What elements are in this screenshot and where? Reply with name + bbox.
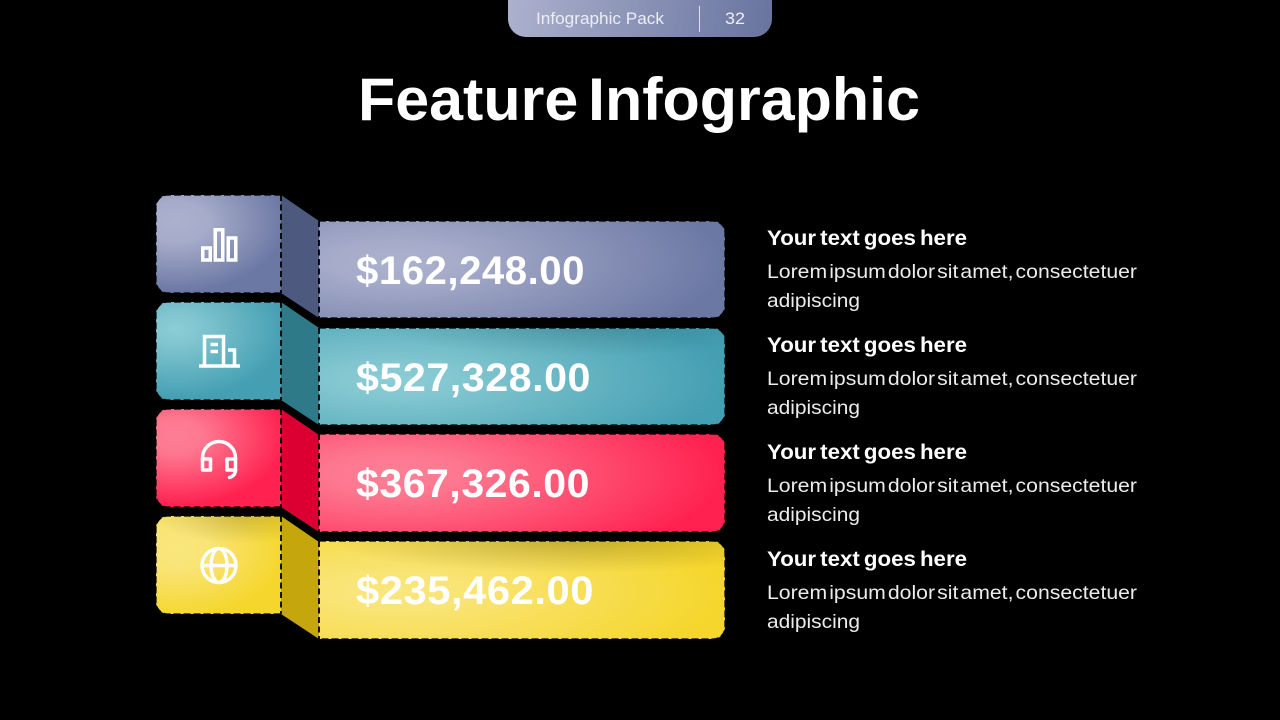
feature row 4: yellow	[155, 516, 725, 639]
feature row 1: slate	[156, 195, 725, 318]
description 3: adipiscing	[767, 504, 860, 526]
description 2	[767, 333, 1138, 419]
value block	[319, 221, 725, 318]
description 3: Lorem ipsum dolor sit amet, consectetuer	[767, 475, 1138, 497]
description 1: Lorem ipsum dolor sit amet, consectetuer	[767, 261, 1138, 283]
feature row 3: red	[156, 409, 725, 532]
icon block	[156, 195, 281, 293]
value: $367,326.00	[356, 462, 590, 506]
page number: 32	[725, 9, 745, 28]
description 3: Your text goes here	[767, 440, 967, 464]
value: $235,462.00	[356, 569, 594, 613]
side fold	[281, 516, 319, 639]
description 4: Your text goes here	[767, 547, 967, 571]
value: $162,248.00	[356, 249, 585, 293]
header tab	[508, 0, 772, 37]
icon: bar chart	[203, 230, 236, 260]
icon: building	[199, 336, 240, 366]
description 2: adipiscing	[767, 397, 860, 419]
description 1: Your text goes here	[767, 226, 967, 250]
value: $527,328.00	[356, 356, 591, 400]
value block	[319, 328, 725, 425]
side fold	[281, 195, 319, 318]
feature row 2: teal	[156, 302, 725, 425]
icon: globe	[202, 548, 236, 582]
side fold	[281, 409, 319, 532]
description 4: adipiscing	[767, 611, 860, 633]
description 1: adipiscing	[767, 290, 860, 312]
icon block	[156, 409, 281, 507]
description 4: Lorem ipsum dolor sit amet, consectetuer	[767, 582, 1138, 604]
icon block	[156, 516, 281, 614]
description 2: Lorem ipsum dolor sit amet, consectetuer	[767, 368, 1138, 390]
icon: headset	[202, 442, 236, 478]
value block	[319, 541, 725, 639]
header tab label: Infographic Pack	[536, 9, 664, 28]
value block	[319, 434, 725, 532]
description 4	[767, 547, 1138, 633]
side fold	[281, 302, 319, 425]
description 2: Your text goes here	[767, 333, 967, 357]
description 1	[767, 226, 1138, 312]
icon block	[156, 302, 281, 400]
title: Feature Infographic	[358, 66, 920, 133]
description 3	[767, 440, 1138, 526]
